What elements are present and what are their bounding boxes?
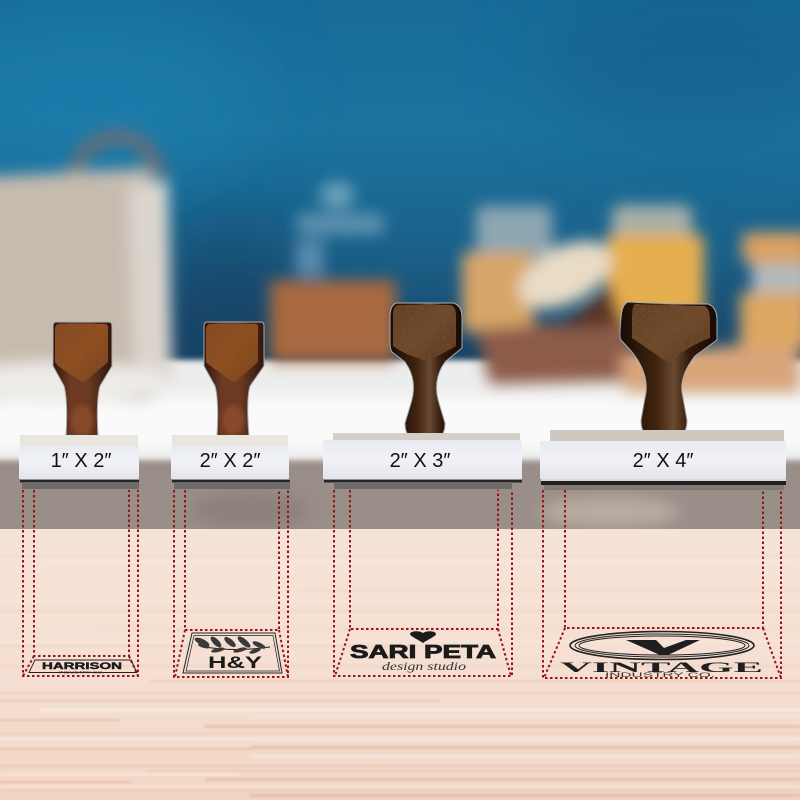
stamp 1 size label: 1″ X 2″ (51, 450, 111, 472)
blurred jars and bowl on the right (462, 205, 800, 392)
background: blurred kitchen wall and counter (0, 0, 800, 550)
logo imprint: Vintage (560, 632, 763, 679)
stamp 4 handle (620, 302, 717, 435)
logo imprint: Harrison: HARRISON (42, 661, 122, 671)
dashed imprint guide: stamp 4 (543, 490, 781, 678)
blurred basket on the left (0, 137, 172, 402)
stamp 2 size label: 2″ X 2″ (200, 450, 260, 472)
stamp 2 handle (204, 322, 264, 436)
stamp 4 size label: 2″ X 4″ (633, 450, 693, 472)
stamp 3 handle (390, 303, 462, 436)
dashed imprint guide: stamp 3 (334, 490, 512, 676)
logo imprint: Harrison (29, 660, 137, 674)
logo imprint: Vintage: INDUSTRY CO. (605, 673, 716, 679)
blurred glass jar (270, 181, 396, 362)
stamp 4: 2 x 4 inch (540, 302, 786, 490)
dashed imprint guide: stamp 1 (23, 490, 138, 676)
stamp 3 size label: 2″ X 3″ (390, 450, 450, 472)
stamp 2: 2 x 2 inch (171, 322, 290, 489)
stamp 3: 2 x 3 inch (323, 303, 522, 489)
stamp 1 handle (53, 322, 112, 436)
stamp 1: 1 x 2 inch (19, 322, 139, 489)
wooden table surface (0, 529, 800, 800)
logo imprint: H&amp;Y leaf branch: H&Y (208, 653, 263, 672)
icon: heart (410, 631, 436, 643)
logo imprint: Sari Peta (350, 631, 496, 673)
dashed imprint guide: stamp 2 (174, 490, 288, 677)
logo imprint: Sari Peta: design studio (382, 659, 466, 673)
stamp 2 block (171, 435, 290, 489)
stamp 1 block (19, 435, 139, 489)
stamp 3 block (323, 433, 522, 489)
logo imprint: Vintage: VINTAGE (560, 660, 763, 676)
stamp 4 block (540, 430, 786, 490)
logo imprint: Sari Peta: SARI PETA (350, 642, 496, 662)
logo imprint: Harrison: INDUSTRY CO. (59, 670, 104, 674)
logo imprint: H&amp;Y leaf branch (183, 633, 282, 673)
